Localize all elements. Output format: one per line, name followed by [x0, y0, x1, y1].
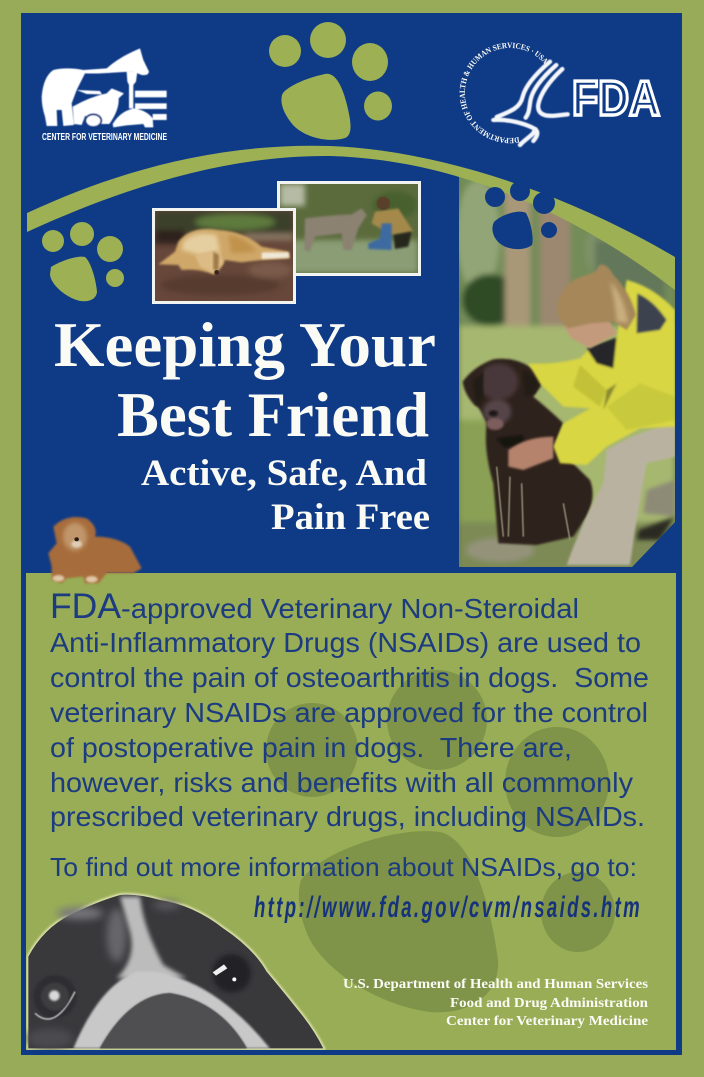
- FDA letters: FDA: [572, 72, 660, 126]
- subheading: Active, Safe, And Pain Free: [141, 453, 430, 538]
- text block: NSAIDs information: of postoperative pain in dogs. There are,: [50, 732, 572, 763]
- photo: black and white dog peeking up: [27, 895, 323, 1048]
- trousers: [567, 423, 675, 565]
- text: find out more: To find out more information about NSAIDs, go to:: [50, 852, 637, 882]
- heading: Keeping Your Best Friend: Keeping Your: [54, 309, 436, 380]
- logo: HHS seal and FDA: [460, 42, 661, 148]
- logo: Center for Veterinary Medicine: CENTER FOR VETERINARY MEDICINE: [42, 131, 167, 143]
- text block: NSAIDs information: veterinary NSAIDs are approved for the control: [50, 697, 648, 728]
- logo: Center for Veterinary Medicine: [42, 48, 167, 143]
- hand: [508, 437, 553, 470]
- text block: NSAIDs information: [50, 587, 649, 832]
- HHS eagle: [493, 62, 568, 145]
- first line with enlarged FDA: FDA: [50, 587, 122, 626]
- subheading: Active, Safe, And Pain Free: Active, Safe, And: [141, 453, 427, 494]
- hair: [557, 265, 636, 330]
- face: [564, 317, 617, 348]
- link: NSAIDs URL: http://www.fda.gov/cvm/nsaids.htm: [254, 891, 640, 924]
- seal ring text: DEPARTMENT OF HEALTH & HUMAN SERVICES · USA: [460, 42, 548, 144]
- footer: agency credits: U.S. Department of Health and Human Services: [343, 977, 649, 992]
- photo: woman in yellow jacket with chocolate labrador: [456, 165, 675, 570]
- jacket: [528, 280, 675, 465]
- first line with enlarged FDA: -approved Veterinary Non-Steroidal: [121, 593, 579, 624]
- footer: agency credits: Food and Drug Administration: [450, 996, 648, 1011]
- labrador: [463, 359, 593, 545]
- text block: NSAIDs information: Anti-Inflammatory Drugs (NSAIDs) are used to: [50, 627, 641, 658]
- photo: man with grey dog: [277, 181, 421, 276]
- icon: large paw print top: [269, 22, 392, 140]
- icon: blue paw print on photo: [485, 181, 557, 249]
- text block: NSAIDs information: control the pain of osteoarthritis in dogs. Some: [50, 662, 649, 693]
- photo: golden retriever lying down: [152, 208, 296, 304]
- photo: small golden retriever sitting on panel edge: [48, 517, 142, 583]
- panel: green lower information area: [26, 573, 676, 1050]
- heading: Keeping Your Best Friend: [54, 309, 436, 450]
- icon: small paw print left: [42, 222, 124, 301]
- first line with enlarged FDA: [50, 587, 579, 626]
- heading: Keeping Your Best Friend: Best Friend: [117, 379, 429, 450]
- green swoosh curve: [27, 146, 675, 290]
- subheading: Active, Safe, And Pain Free: Pain Free: [271, 497, 430, 538]
- watermark paw print: [266, 670, 615, 1012]
- text block: NSAIDs information: however, risks and benefits with all commonly: [50, 767, 633, 798]
- footer: agency credits: [343, 977, 649, 1029]
- grass blades: [497, 467, 570, 540]
- text block: NSAIDs information: prescribed veterinary drugs, including NSAIDs.: [50, 801, 645, 832]
- footer: agency credits: Center for Veterinary Medicine: [446, 1014, 648, 1029]
